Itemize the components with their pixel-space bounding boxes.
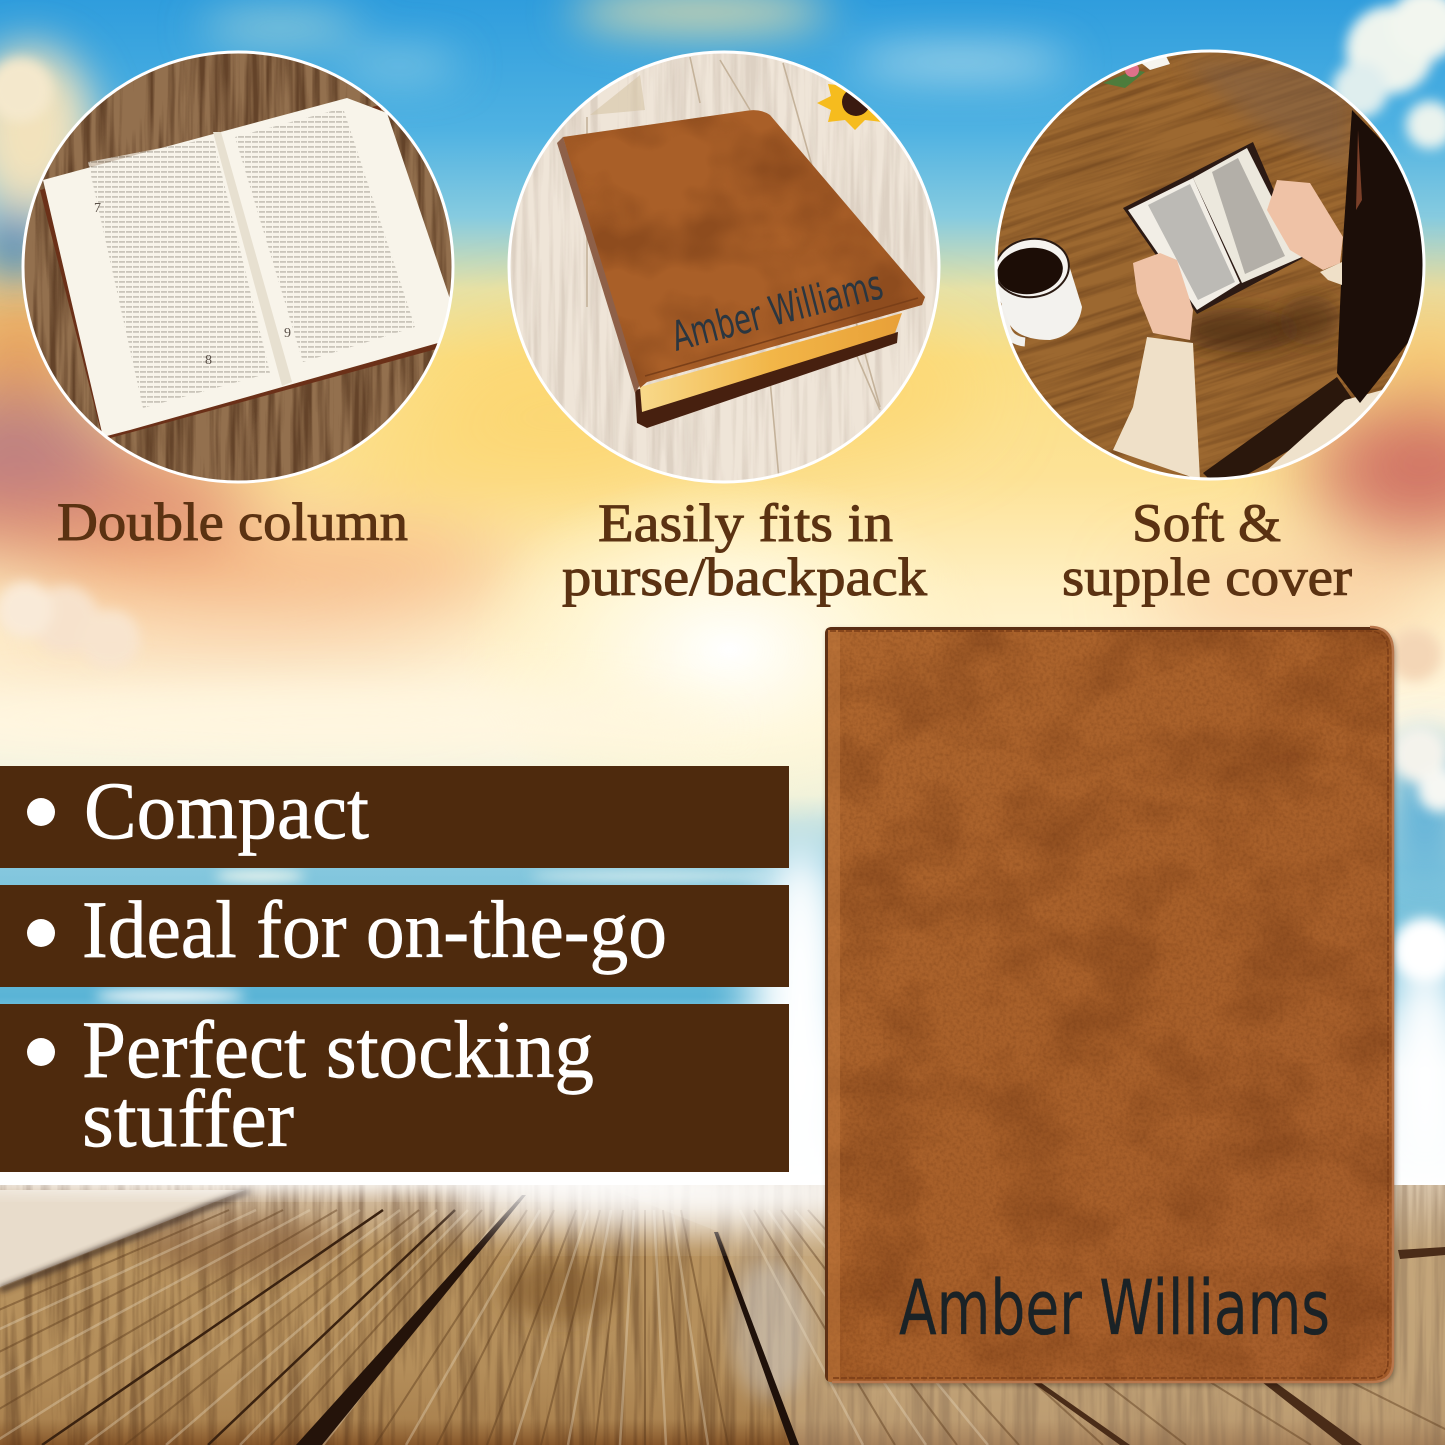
- feature bar: Ideal for on-the-go: Ideal for on-the-go: [82, 884, 667, 975]
- circle photo: leather Bible on white wood: [505, 50, 945, 490]
- chapter numbers on pages: 9: [284, 326, 291, 341]
- chapter numbers on pages: 8: [205, 353, 212, 368]
- caption: Easily fits in purse/backpack: [562, 493, 927, 607]
- circle photo: reader holding Bible with coffee: [994, 50, 1426, 480]
- feature bar: Ideal for on-the-go: [0, 884, 789, 987]
- hands and sweater sleeve: [1113, 180, 1343, 480]
- caption: Easily fits in purse/backpack: purse/backpack: [562, 547, 927, 607]
- feature bar: Perfect stocking stuffer: [0, 1004, 789, 1172]
- icon: sunflower: [817, 84, 881, 130]
- caption: Double column: Double column: [57, 492, 408, 552]
- mug: [991, 234, 1082, 342]
- chapter numbers on pages: [94, 201, 291, 368]
- caption: Soft & supple cover: supple cover: [1062, 547, 1352, 607]
- small flower on table: [1103, 56, 1170, 88]
- clouds with defined edges: [0, 0, 1445, 1003]
- leather Bible cover with personalised name: [825, 627, 1395, 1385]
- small open Bible: [1123, 142, 1303, 314]
- caption: Soft & supple cover: [1062, 493, 1352, 607]
- chapter numbers on pages: 7: [94, 201, 101, 216]
- caption: Soft & supple cover: Soft &: [1132, 493, 1281, 553]
- circle photo: open Bible, double column pages: [20, 50, 460, 490]
- caption: Easily fits in purse/backpack: Easily fits in: [598, 493, 893, 553]
- feature bar: Perfect stocking stuffer: stuffer: [82, 1073, 294, 1164]
- debossed name on angled cover: Amber Williams: [667, 260, 888, 361]
- wooden table floor: [0, 1160, 1445, 1445]
- feature bar: Compact: [0, 765, 789, 868]
- feature bar: Perfect stocking stuffer: Perfect stocking: [82, 1004, 594, 1095]
- feature bar: Compact: Compact: [84, 765, 369, 856]
